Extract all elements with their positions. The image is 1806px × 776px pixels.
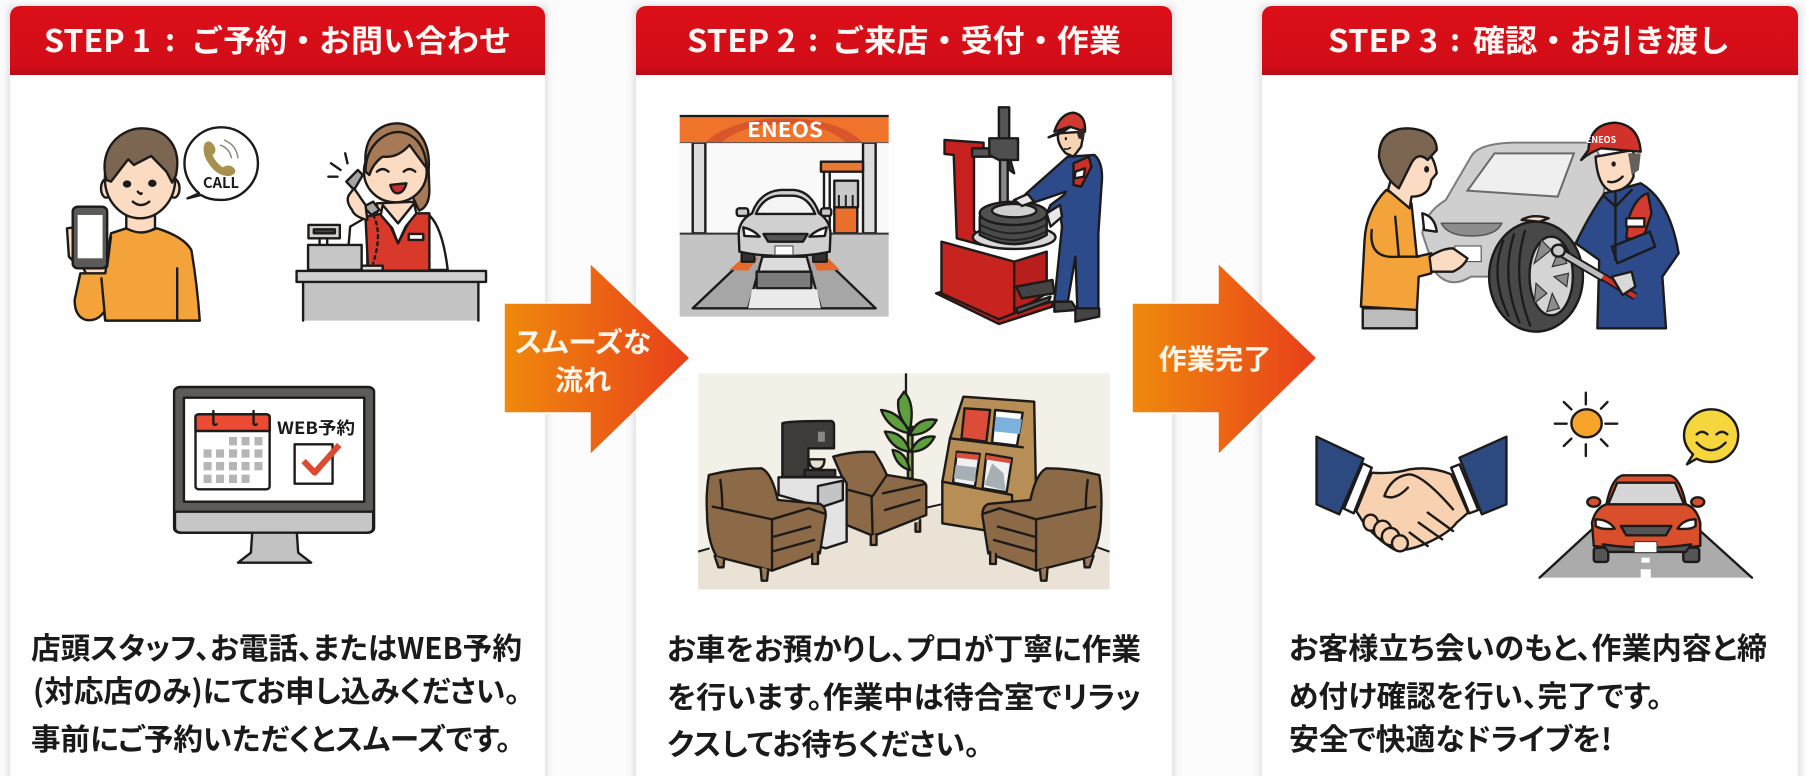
illustration: waiting room [698, 373, 1110, 589]
arrow: smooth flow: 流れ [555, 359, 611, 399]
panel: step 1 [8, 6, 547, 776]
customer [1361, 128, 1467, 328]
panel: step 1: CALL [203, 172, 239, 193]
armchair back [833, 452, 926, 545]
arrow: smooth flow: スムーズな [515, 321, 651, 361]
coffee table and machine [779, 421, 847, 548]
icon: customer with smartphone [67, 127, 258, 321]
armchair right [982, 468, 1101, 581]
description: step 1 [31, 624, 522, 759]
heading: step 3: 確認・お引き渡し [1473, 16, 1730, 61]
heading: step 1 [10, 6, 545, 75]
armchair left [707, 468, 826, 581]
mechanic [1552, 123, 1679, 328]
description: step 3: 安全で快適なドライブを! [1289, 715, 1612, 759]
icon: monitor with WEB reservation [174, 387, 374, 563]
heading: step 3: : [1450, 15, 1460, 60]
heading: step 2: ご来店・受付・作業 [832, 16, 1121, 61]
description: step 2: クスしてお待ちください。 [667, 720, 980, 764]
heading: step 3 [1262, 6, 1798, 75]
description: step 3: お客様立ち会いのもと、作業内容と締 [1289, 624, 1767, 668]
illustration: ENEOS service station [680, 116, 889, 317]
magazine rack [942, 397, 1036, 535]
speech bubble: call [184, 127, 258, 200]
icon: red car on road [1540, 475, 1752, 578]
description: step 1: (対応店のみ)にてお申し込みください。 [33, 667, 520, 711]
arrow: work complete: 作業完了 [1158, 338, 1272, 378]
icon: sun [1555, 393, 1617, 456]
arrow: work complete [1132, 263, 1317, 455]
heading: step 2: : [808, 15, 818, 60]
description: step 2: を行います。作業中は待合室でリラッ [667, 673, 1141, 717]
description: step 3: め付け確認を行い、完了です。 [1289, 672, 1662, 716]
car [1422, 143, 1605, 282]
tire [1489, 216, 1583, 332]
heading: step 3: STEP 3 [1328, 16, 1438, 61]
description: step 1: 事前にご予約いただくとスムーズです。 [31, 715, 511, 759]
heading: step 1: : [165, 15, 175, 60]
heading: step 2: STEP 2 [687, 16, 796, 61]
panel: step 2: ENEOS [747, 114, 823, 143]
heading: step 2 [636, 6, 1172, 75]
heading: step 1: STEP 1 [44, 16, 151, 61]
panel: step 3 [1260, 6, 1800, 776]
panel: step 1: WEB予約 [277, 414, 355, 439]
arrow: smooth flow [504, 263, 690, 455]
heading: step 1: ご予約・お問い合わせ [191, 16, 511, 61]
description: step 2 [667, 625, 1141, 764]
illustration: mechanic at tire changer [936, 107, 1102, 324]
icon: smiling speech bubble [1684, 409, 1738, 464]
description: step 3 [1289, 624, 1767, 759]
illustration: customer and mechanic checking tire [1361, 123, 1679, 332]
description: step 1: 店頭スタッフ、お電話、またはWEB予約 [31, 624, 522, 668]
panel: step 3: ENEOS [1586, 133, 1617, 146]
icon: handshake [1317, 437, 1506, 551]
description: step 2: お車をお預かりし、プロが丁寧に作業 [667, 625, 1141, 669]
panel: step 2 [634, 6, 1174, 776]
icon: receptionist on phone at counter [297, 123, 486, 321]
plant [881, 392, 937, 478]
